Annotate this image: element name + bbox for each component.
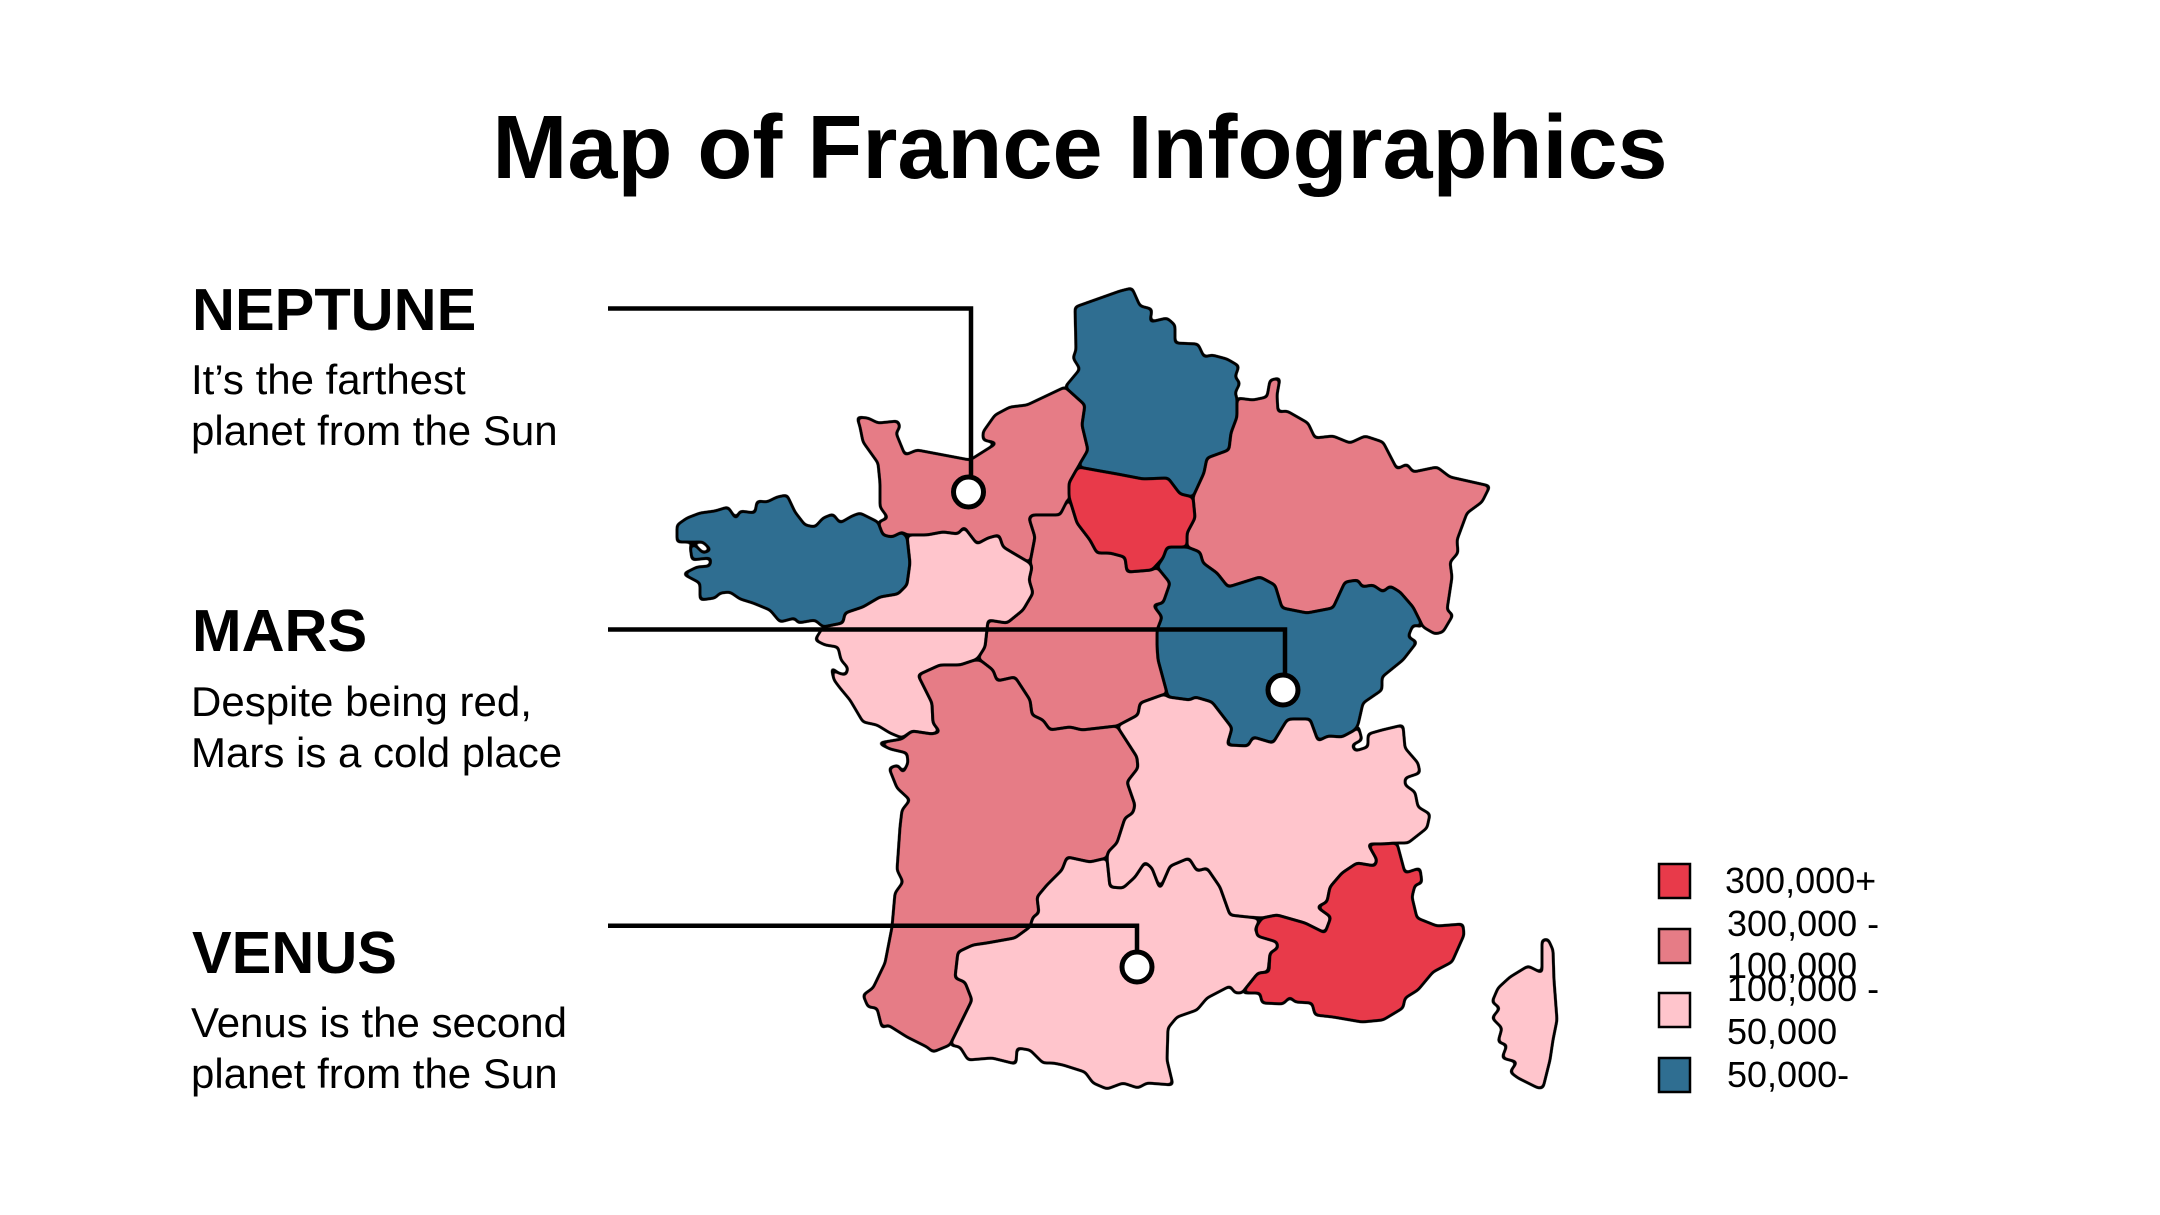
legend item: 300,000 - 100,000: 100,000	[1727, 945, 1857, 986]
legend item: 100,000 - 50,000	[1659, 968, 1879, 1052]
legend item: 300,000 - 100,000: 300,000 -	[1727, 903, 1879, 944]
connector: Mars	[608, 630, 1298, 705]
legend item: 100,000 - 50,000: 50,000	[1727, 1011, 1837, 1052]
description: Venus: Venus is the second	[191, 999, 567, 1046]
legend item: 50,000-	[1659, 1054, 1849, 1095]
description: Mars: Despite being red,	[191, 678, 532, 725]
legend item: 50,000-: 50,000-	[1727, 1054, 1849, 1095]
description: Neptune: It’s the farthest	[191, 356, 466, 403]
text block: Neptune	[191, 276, 558, 454]
heading: Venus: VENUS	[192, 919, 397, 986]
text block: Mars	[191, 597, 562, 776]
region: Hauts-de-France	[1065, 288, 1240, 497]
map of France	[677, 288, 1557, 1089]
text block: Venus	[191, 919, 567, 1097]
legend item: 300,000 - 100,000	[1659, 903, 1879, 986]
legend	[1659, 860, 1879, 1095]
description: Mars: Mars is a cold place	[191, 729, 562, 776]
heading: Neptune: NEPTUNE	[192, 276, 476, 343]
region: Nouvelle-Aquitaine	[863, 660, 1138, 1052]
region: Occitanie	[950, 857, 1278, 1089]
region: Provence-Alpes-Cote d'Azur	[1242, 843, 1464, 1022]
region: Centre-Val de Loire	[978, 497, 1170, 730]
region: Corsica	[1492, 939, 1557, 1088]
legend item: 300,000+: 300,000+	[1725, 860, 1876, 901]
region: Bourgogne-Franche-Comte	[1153, 547, 1423, 746]
region: Grand Est	[1187, 378, 1490, 634]
region: Pays de la Loire	[815, 527, 1033, 738]
region: Normandy	[857, 387, 1088, 563]
region: Ile-de-France	[1069, 467, 1195, 572]
title: Map of France Infographics	[492, 98, 1668, 198]
heading: Mars: MARS	[192, 597, 367, 664]
description: Neptune: planet from the Sun	[191, 407, 558, 454]
connector: Neptune	[608, 308, 984, 507]
region: Auvergne-Rhone-Alpes	[1107, 694, 1430, 933]
legend item: 300,000+	[1659, 860, 1876, 901]
legend item: 100,000 - 50,000: 100,000 -	[1727, 968, 1879, 1009]
description: Venus: planet from the Sun	[191, 1050, 558, 1097]
connector: Venus	[608, 926, 1152, 982]
region: Brittany	[677, 495, 910, 627]
